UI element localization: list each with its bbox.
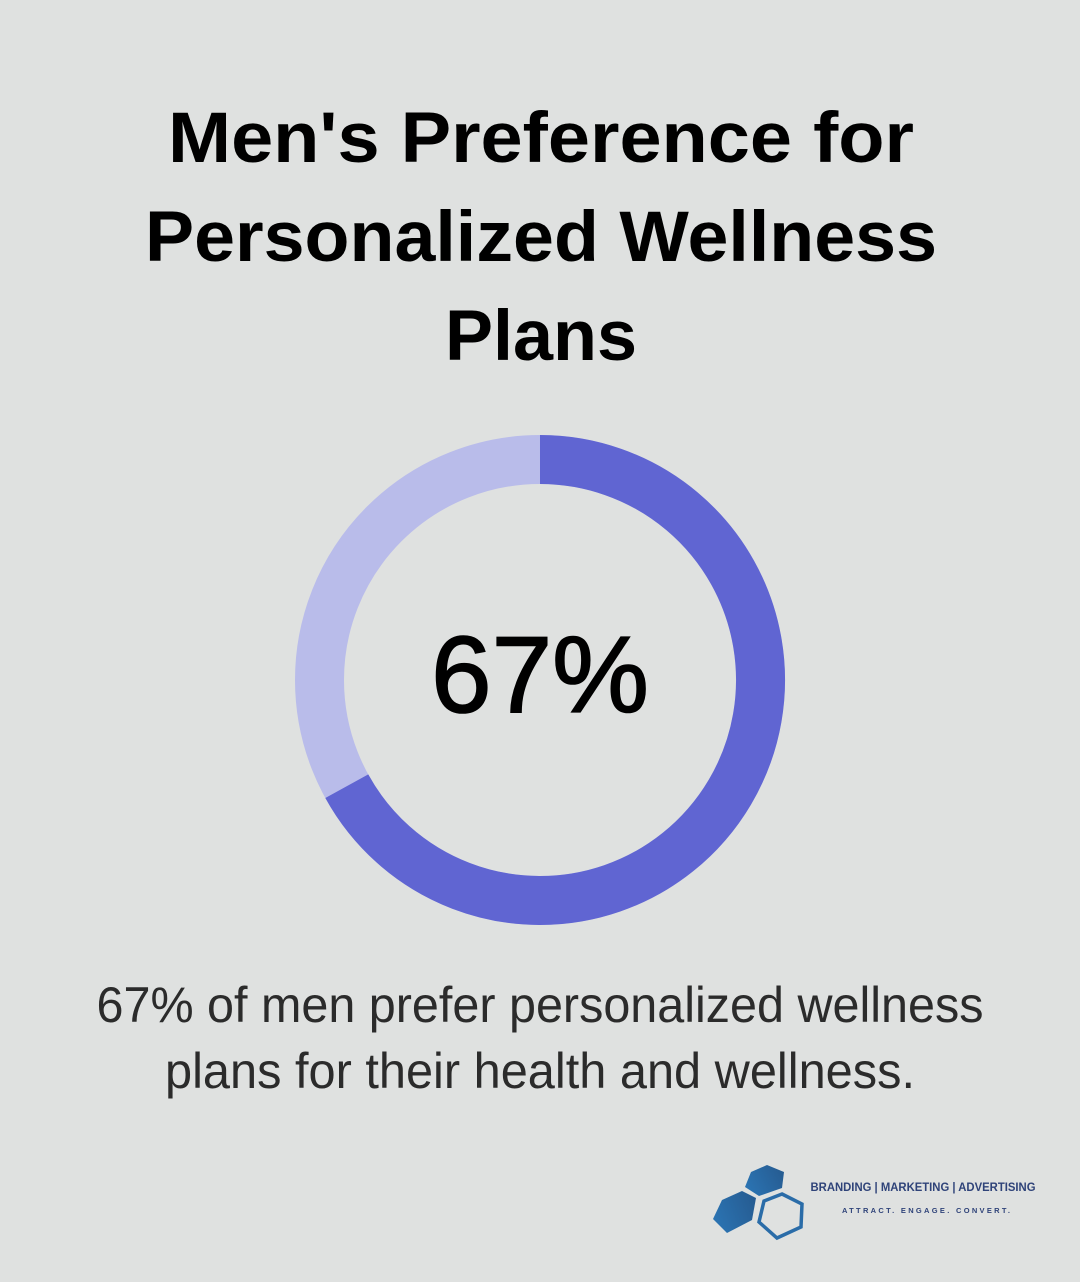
description: 67% of men prefer personalized wellness	[96, 977, 984, 1033]
title: Plans	[445, 297, 637, 376]
title: Personalized Wellness	[145, 198, 937, 277]
logo tagline: BRANDING | MARKETING | ADVERTISING	[810, 1182, 1036, 1194]
description: plans for their health and wellness.	[165, 1043, 915, 1099]
icon: hexagons	[713, 1165, 802, 1238]
title: Men's Preference for	[168, 99, 914, 178]
donut chart: 67%	[320, 460, 761, 900]
logo	[713, 1165, 1036, 1238]
description	[96, 977, 984, 1099]
donut value: 67%	[431, 614, 649, 736]
title	[145, 99, 937, 376]
logo slogan: ATTRACT. ENGAGE. CONVERT.	[842, 1206, 1010, 1215]
